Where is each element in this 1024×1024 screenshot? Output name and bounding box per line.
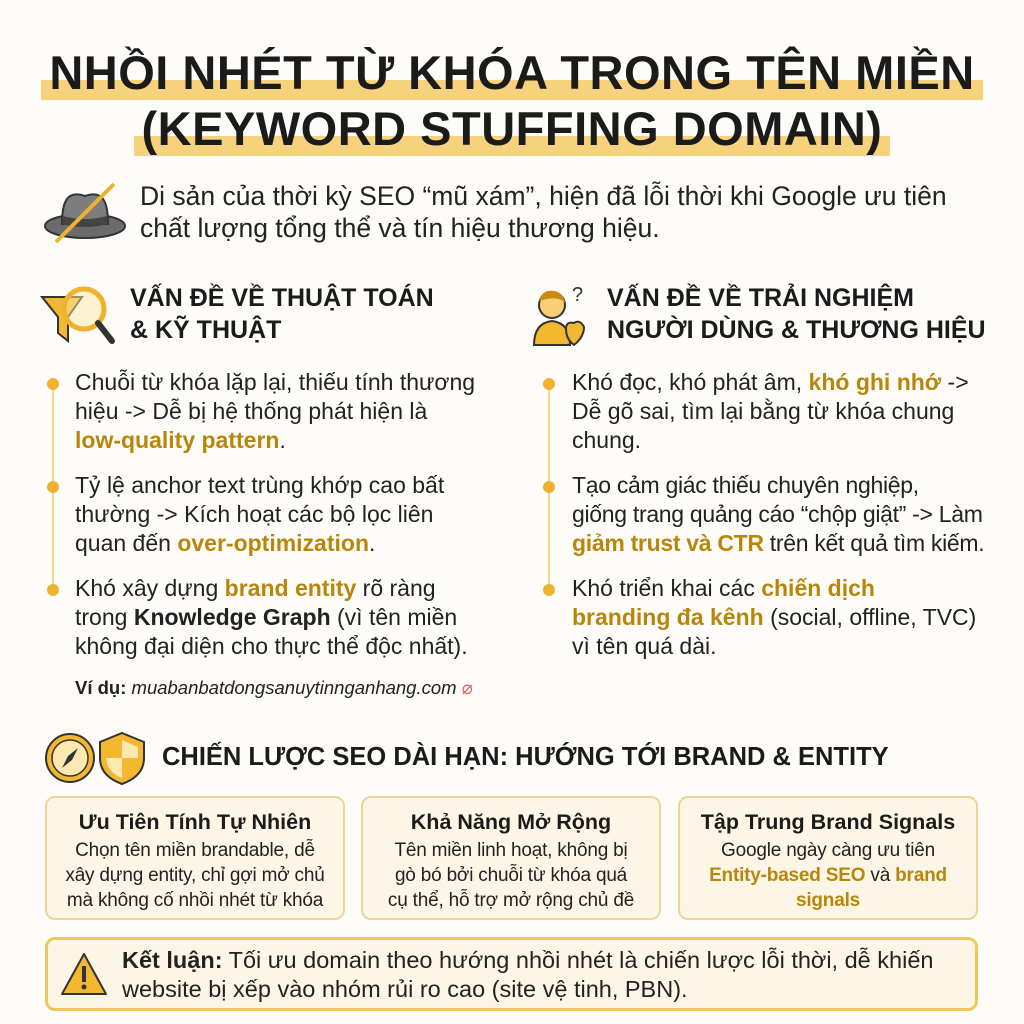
- card: brand signals: Tập Trung Brand Signals: [701, 810, 955, 834]
- card: natural priority: Ưu Tiên Tính Tự Nhiên: [79, 810, 311, 834]
- conclusion box: [45, 937, 978, 1011]
- panel: left bullets: Tỷ lệ anchor text trùng khớp cao bất: [75, 472, 444, 498]
- card: scalability: [361, 796, 661, 920]
- card: natural priority: xây dựng entity, chỉ gợi mở chủ: [65, 865, 325, 886]
- panel: right bullets: Dễ gõ sai, tìm lại bằng từ khóa chung: [572, 398, 954, 424]
- heading: long-term strategy: CHIẾN LƯỢC SEO DÀI HẠN: HƯỚNG TỚI BRAND & ENTITY: [162, 743, 889, 771]
- panel: left bullets: low-quality pattern.: [75, 427, 286, 453]
- panel: right bullets: branding đa kênh (social, offline, TVC): [572, 604, 976, 630]
- panel: left bullets: thường -> Kích hoạt các bộ lọc liên: [75, 501, 433, 527]
- panel: left bullets: không đại diện cho thực thể độc nhất).: [75, 633, 468, 659]
- panel: left bullets: quan đến over-optimization.: [75, 530, 375, 556]
- card: brand signals: [678, 796, 978, 920]
- panel: left bullets: Khó xây dựng brand entity rõ ràng: [75, 575, 436, 601]
- icon: sad person broken heart: [533, 284, 585, 346]
- panel: right bullets: Khó đọc, khó phát âm, khó ghi nhớ ->: [572, 369, 969, 395]
- panel: right bullets: giống trang quảng cáo “chộp giật” -> Làm: [572, 501, 983, 527]
- panel: left bullets: Chuỗi từ khóa lặp lại, thiếu tính thương: [75, 369, 475, 395]
- heading: UX & brand issues: NGƯỜI DÙNG & THƯƠNG HIỆU: [607, 316, 986, 344]
- icon: funnel magnifier: [40, 286, 115, 344]
- card: brand signals: Google ngày càng ưu tiên: [721, 840, 935, 861]
- icon: crossed grey hat: [44, 182, 126, 244]
- subtitle text: [140, 181, 947, 243]
- conclusion box: website bị xếp vào nhóm rủi ro cao (site vệ tinh, PBN).: [122, 976, 688, 1002]
- heading: UX & brand issues: VẤN ĐỀ VỀ TRẢI NGHIỆM: [607, 284, 914, 312]
- card: natural priority: mà không cố nhồi nhét từ khóa: [67, 890, 323, 911]
- subtitle text: chất lượng tổng thể và tín hiệu thương hiệu.: [140, 213, 660, 243]
- panel: right bullets: giảm trust và CTR trên kết quả tìm kiếm.: [572, 530, 984, 556]
- icon: warning: [61, 953, 107, 995]
- card: brand signals: signals: [796, 890, 860, 911]
- panel: left bullets: [47, 369, 475, 698]
- panel: left bullets: Ví dụ: muabanbatdongsanuytinnganhang.com ⌀: [75, 677, 473, 698]
- heading: algorithm issues: VẤN ĐỀ VỀ THUẬT TOÁN: [130, 284, 434, 312]
- heading: algorithm issues: [130, 284, 434, 344]
- card: natural priority: Chọn tên miền brandable, dễ: [75, 840, 315, 861]
- panel: right bullets: Khó triển khai các chiến dịch: [572, 575, 875, 601]
- card: natural priority: [45, 796, 345, 920]
- panel: left bullets: trong Knowledge Graph (vì tên miền: [75, 604, 457, 630]
- title: NHỒI NHÉT TỪ KHÓA TRONG TÊN MIỀN: [49, 46, 975, 99]
- icon: compass and shield: [45, 732, 145, 786]
- panel: right bullets: [543, 369, 984, 659]
- title: [41, 46, 983, 156]
- conclusion box: Kết luận: Tối ưu domain theo hướng nhồi nhét là chiến lược lỗi thời, dễ khiến: [122, 947, 933, 973]
- card: brand signals: Entity-based SEO và brand: [709, 865, 947, 886]
- panel: right bullets: vì tên quá dài.: [572, 633, 716, 659]
- icon: sad person broken heart: ?: [572, 284, 583, 306]
- panel: right bullets: chung.: [572, 427, 641, 453]
- card: scalability: Khả Năng Mở Rộng: [411, 810, 611, 834]
- card: scalability: cụ thể, hỗ trợ mở rộng chủ đề: [388, 890, 634, 911]
- title: (KEYWORD STUFFING DOMAIN): [142, 102, 882, 155]
- subtitle text: Di sản của thời kỳ SEO “mũ xám”, hiện đã lỗi thời khi Google ưu tiên: [140, 181, 947, 211]
- heading: UX & brand issues: [607, 284, 986, 344]
- card: scalability: gò bó bởi chuỗi từ khóa quá: [395, 865, 627, 886]
- card: scalability: Tên miền linh hoạt, không bị: [394, 840, 628, 861]
- heading: algorithm issues: & KỸ THUẬT: [130, 316, 281, 344]
- panel: right bullets: Tạo cảm giác thiếu chuyên nghiệp,: [572, 472, 919, 498]
- panel: left bullets: hiệu -> Dễ bị hệ thống phát hiện là: [75, 398, 427, 424]
